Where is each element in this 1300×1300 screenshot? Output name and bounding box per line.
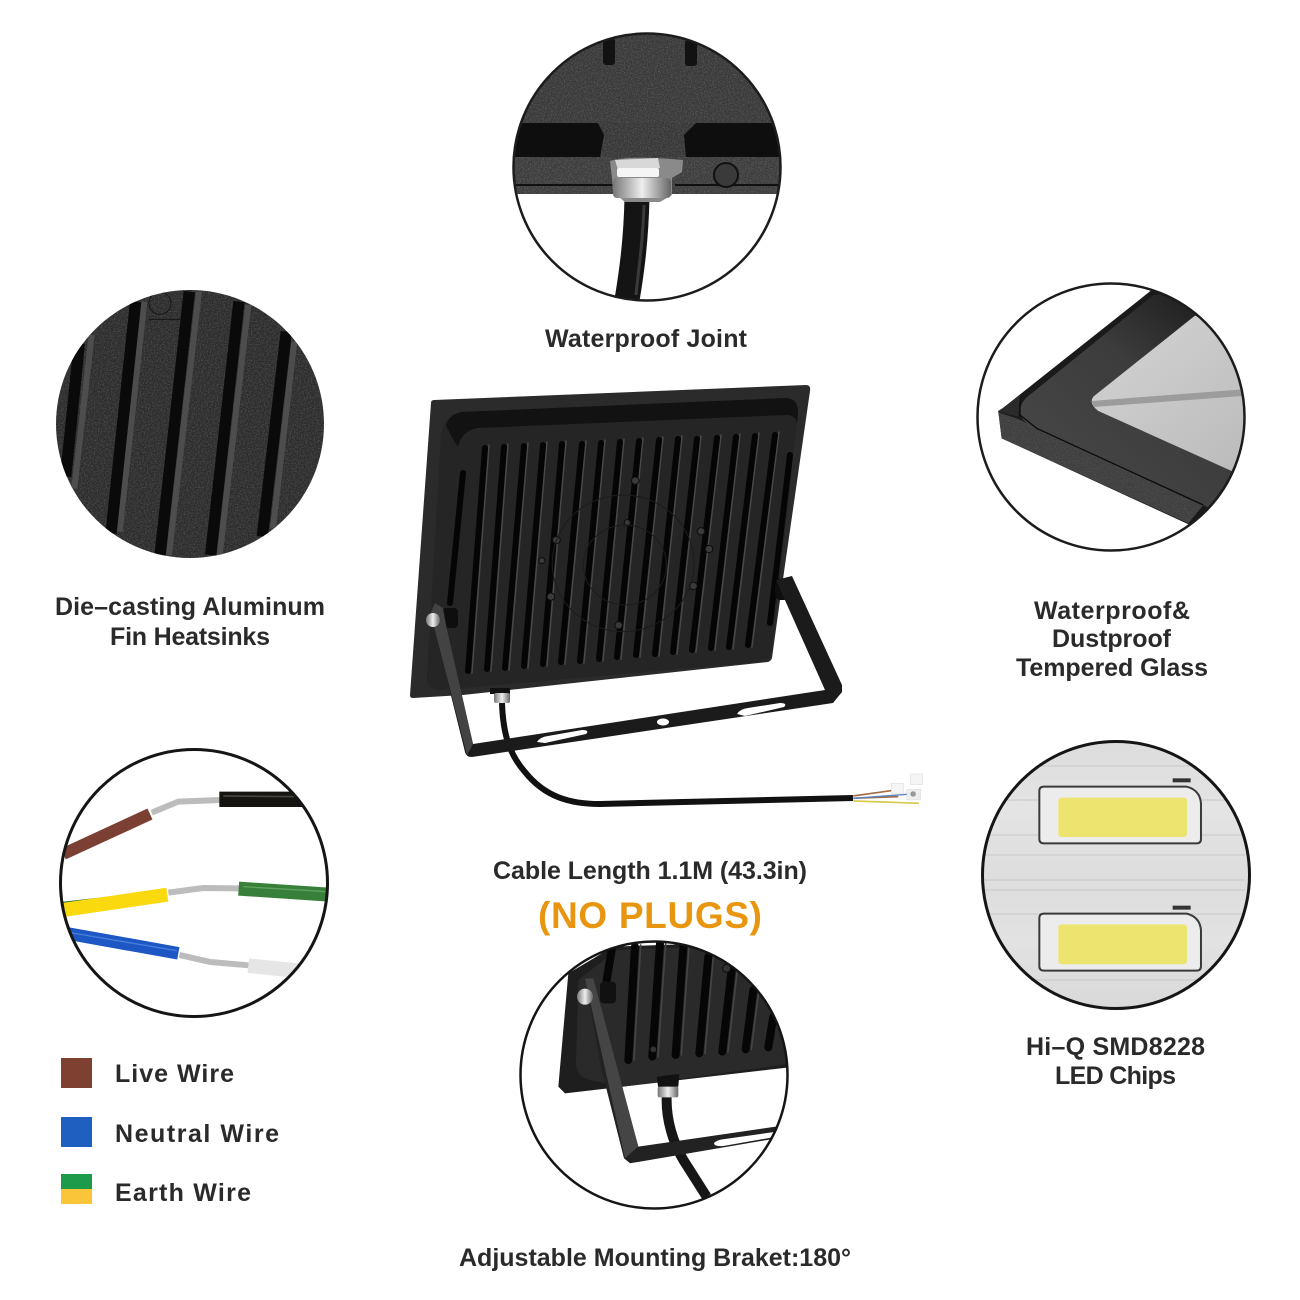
heatsink fins (450, 432, 790, 673)
legend: wire colours (61, 1058, 279, 1207)
caption: LED chips: LED Chips (1055, 1062, 1176, 1090)
legend item: live wire: Live Wire (115, 1060, 234, 1088)
legend item: neutral wire: Neutral Wire (115, 1120, 279, 1148)
caption: waterproof and dustproof tempered glass: Waterproof& (1034, 597, 1190, 625)
legend item: live wire (61, 1058, 234, 1088)
circle: LED chips (980, 740, 1252, 1012)
housing (410, 385, 810, 698)
cable gland (490, 688, 510, 703)
caption: LED chips (1026, 1033, 1205, 1090)
mounting bracket (426, 576, 842, 757)
caption: adjustable mounting bracket: Adjustable Mounting Braket:180° (459, 1244, 851, 1272)
legend item: neutral wire (61, 1117, 279, 1148)
circle: tempered glass corner (978, 284, 1270, 550)
cable (502, 703, 922, 804)
main product: flood light rear view (410, 385, 922, 804)
caption: waterproof and dustproof tempered glass (1016, 597, 1208, 682)
caption: waterproof and dustproof tempered glass: Dustproof (1052, 625, 1172, 653)
caption: waterproof and dustproof tempered glass: Tempered Glass (1016, 654, 1208, 682)
caption: die-casting aluminum fin heatsinks: Die–casting Aluminum (55, 593, 325, 621)
caption: waterproof joint: Waterproof Joint (545, 325, 748, 353)
bolt and pivots (442, 580, 790, 628)
circle: aluminum fin heatsinks (50, 285, 330, 565)
caption: die-casting aluminum fin heatsinks (55, 593, 325, 651)
circle: adjustable bracket (520, 940, 810, 1208)
caption: LED chips: Hi–Q SMD8228 (1026, 1033, 1205, 1061)
centre mounting bosses (539, 477, 713, 632)
legend item: earth wire: Earth Wire (115, 1179, 251, 1207)
caption: die-casting aluminum fin heatsinks: Fin Heatsinks (110, 623, 270, 651)
notice: no plugs: (NO PLUGS) (538, 895, 762, 936)
legend item: earth wire (61, 1174, 251, 1207)
caption: cable length: Cable Length 1.1M (43.3in) (493, 857, 807, 885)
circle: waterproof joint (510, 30, 785, 304)
circle: wire colours (60, 750, 330, 1016)
